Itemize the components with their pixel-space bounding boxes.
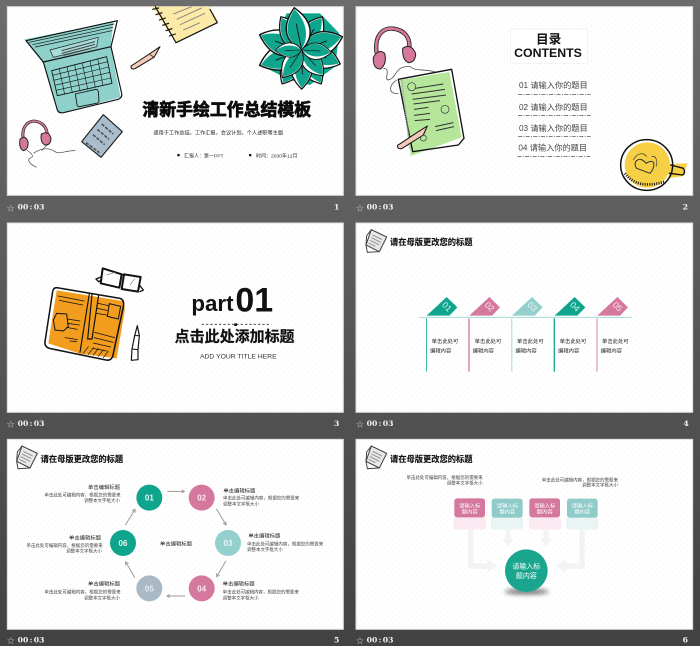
centre label: 单击编辑标题 — [160, 540, 193, 548]
box 1 — [454, 498, 485, 517]
icon: headphones — [373, 29, 435, 94]
footer: slide 3 time — [6, 419, 44, 431]
step 04: 04 — [197, 584, 207, 593]
step 03 — [215, 530, 241, 556]
part number: part — [191, 291, 234, 316]
page number 2: 2 — [683, 203, 688, 212]
part number — [191, 282, 273, 320]
icon: pencil — [131, 47, 160, 69]
box 3 — [529, 498, 560, 517]
contents item 04 — [517, 143, 591, 156]
step 06: 06 — [119, 539, 128, 548]
text block 04 — [223, 580, 299, 601]
right description — [542, 476, 618, 489]
slide 6 heading: 请在母版更改您的标题 — [390, 454, 473, 464]
flag column 01 — [426, 297, 459, 372]
flag column 03 — [511, 297, 544, 372]
text block 04: 调整本文字框大小 — [223, 594, 259, 601]
box 4 — [567, 499, 598, 518]
contents heading: 目录 — [536, 32, 562, 46]
slide 1 background — [7, 7, 343, 195]
text block 01: 单击编辑标题 — [88, 483, 121, 491]
flag column 01: 01 — [440, 300, 454, 314]
centre circle: 请输入标 — [512, 562, 540, 571]
panel: slide 5 cycle — [6, 439, 343, 646]
left description: 单击此处可编辑内容，根据您的需要来 — [406, 474, 483, 481]
right description: 调整本文字框大小 — [582, 482, 618, 489]
flag column 03: 编辑内容 — [515, 347, 537, 355]
flow arrows — [468, 530, 585, 573]
flag column 05: 单击此处可 — [602, 337, 629, 345]
flag column 04: 编辑内容 — [558, 347, 580, 355]
slide 3 background — [7, 223, 343, 412]
step 04 — [189, 575, 215, 601]
text block 03: 调整本文字框大小 — [247, 546, 283, 553]
icon: document — [17, 446, 37, 469]
footer: slide 4 time — [356, 419, 393, 431]
contents item 03: 03 请输入你的题目 — [519, 123, 588, 133]
contents item 04: 04 请输入你的题目 — [518, 143, 587, 153]
box 1: 请输入标 — [459, 501, 481, 509]
text block 06: 单击此处可编辑内容，根据您的需要来 — [26, 542, 103, 549]
icon: headphones with cord — [20, 121, 75, 167]
text block 03 — [247, 531, 324, 553]
footer: slide 6 time — [356, 635, 393, 646]
icon: orange open book — [45, 288, 125, 360]
contents item 02 — [518, 102, 591, 116]
text block 05: 单击编辑标题 — [88, 580, 121, 588]
flag column 02 — [468, 297, 502, 372]
slide 5 heading: 请在母版更改您的标题 — [41, 454, 124, 464]
flag column 05 — [596, 297, 629, 372]
text block 03: 单击此处可编辑内容，根据您的需要来 — [247, 540, 324, 547]
panel: slide 3 section — [6, 223, 343, 431]
date: 时间：2030年12月 — [256, 153, 298, 160]
text block 06: 调整本文字框大小 — [66, 548, 102, 555]
section title: 点击此处添加标题 — [175, 327, 295, 345]
flag column 05: 编辑内容 — [601, 347, 623, 355]
cycle arrows — [126, 490, 226, 597]
panel: slide 4 flags — [356, 223, 693, 431]
slide 6 background — [356, 439, 693, 629]
icon: laptop — [24, 21, 122, 113]
text block 03: 单击编辑标题 — [248, 531, 281, 539]
step 03: 03 — [224, 539, 233, 548]
flag column 02: 02 — [483, 300, 497, 314]
footer: slide 2 time: 00 : 03 — [367, 203, 393, 212]
text block 06: 单击编辑标题 — [69, 534, 102, 542]
panel: slide 1 cover — [6, 6, 346, 214]
contents heading — [510, 29, 587, 63]
slide 5 background — [7, 439, 343, 629]
page number 1: 1 — [334, 203, 339, 212]
contents item 01: 01 请输入你的题目 — [519, 80, 588, 90]
flag column 04: 单击此处可 — [560, 337, 587, 345]
footer: slide 2 time — [356, 203, 393, 214]
step 05: 05 — [145, 584, 154, 593]
text block 04: 单击编辑标题 — [223, 580, 255, 588]
icon: coffee cup — [621, 140, 687, 190]
panel: slide 2 contents — [356, 7, 693, 214]
text block 01 — [44, 483, 121, 504]
contents heading: CONTENTS — [514, 46, 582, 60]
contents item 01 — [518, 80, 591, 95]
icon: document — [366, 230, 387, 252]
flag column 01: 编辑内容 — [430, 347, 452, 355]
text block 01: 调整本文字框大小 — [84, 497, 120, 504]
footer: slide 2 time: ☆ — [356, 203, 365, 214]
slide 2 background — [356, 7, 693, 195]
footer: slide 1 time — [6, 203, 44, 214]
icon: glasses — [96, 268, 143, 292]
right description: 单击此处可编辑内容，根据您的需要来 — [542, 476, 618, 483]
step 05 — [136, 575, 162, 601]
centre circle: 题内容 — [516, 571, 537, 580]
page number 4: 4 — [683, 419, 689, 428]
page number 3: 3 — [334, 419, 339, 428]
title: 清新手绘工作总结模板 — [142, 99, 311, 119]
left description: 调整本文字框大小 — [447, 479, 483, 486]
flag column 04: 04 — [568, 300, 582, 314]
panel: slide 6 flow — [356, 439, 693, 646]
icon: document — [366, 446, 387, 469]
step 01 — [136, 485, 162, 511]
icon: tablet — [82, 115, 122, 157]
text block 04: 单击此处可编辑内容，根据您的需要来 — [223, 589, 299, 596]
slide 4 background — [356, 223, 693, 412]
footer: slide 3 time: ☆ — [6, 420, 15, 431]
circle shadow — [505, 589, 549, 595]
box reflections — [454, 517, 598, 529]
footer: slide 3 time: 00 : 03 — [18, 419, 44, 428]
text block 02 — [223, 486, 300, 507]
icon: plant — [255, 6, 346, 89]
box 4: 题内容 — [574, 507, 591, 515]
footer: slide 1 time: 00 : 03 — [18, 203, 44, 212]
part number: 01 — [235, 282, 273, 320]
icon: pen — [131, 326, 139, 360]
text block 02: 单击此处可编辑内容，根据您的需要来 — [223, 495, 300, 502]
text block 05: 单击此处可编辑内容，根据您的需要来 — [44, 589, 121, 596]
box 2: 题内容 — [499, 507, 516, 515]
flag column 02: 单击此处可 — [475, 337, 502, 345]
text block 02: 单击编辑标题 — [223, 486, 256, 494]
icon: pencil — [397, 126, 427, 149]
contents item 03 — [518, 123, 591, 137]
contents item 02: 02 请输入你的题目 — [519, 102, 588, 112]
flag column 05: 05 — [611, 300, 625, 314]
footer: slide 6 time: 00 : 03 — [367, 635, 393, 644]
subtitle: 适用于工作总结，工作汇报，会议计划，个人述职等主题 — [153, 128, 283, 136]
box 3: 题内容 — [537, 507, 553, 515]
footer: slide 4 time: 00 : 03 — [367, 419, 393, 428]
text block 05: 调整本文字框大小 — [84, 594, 120, 601]
footer: slide 4 time: ☆ — [356, 420, 365, 431]
page number 5: 5 — [334, 635, 339, 644]
section subtitle: ADD YOUR TITLE HERE — [200, 353, 277, 360]
footer: slide 5 time: 00 : 03 — [18, 635, 44, 644]
presenter: 汇报人：第一PPT — [184, 153, 224, 160]
box 2: 请输入标 — [497, 501, 519, 509]
flag column 01: 单击此处可 — [432, 337, 459, 345]
flag column 02: 编辑内容 — [473, 347, 495, 355]
icon: spiral notebook — [152, 7, 218, 43]
text block 06 — [26, 534, 103, 555]
step 06 — [110, 530, 136, 556]
box 2 — [492, 499, 523, 518]
flag column 04 — [554, 297, 587, 372]
text block 05 — [44, 580, 121, 601]
text block 01: 单击此处可编辑内容，根据您的需要来 — [44, 492, 121, 499]
centre circle — [505, 549, 548, 592]
step 01: 01 — [145, 494, 154, 503]
icon: green document — [398, 69, 464, 156]
flag column 03: 单击此处可 — [517, 337, 544, 345]
left description — [406, 474, 483, 486]
box 4: 请输入标 — [572, 501, 594, 509]
footer: slide 1 time: ☆ — [6, 203, 15, 214]
box 1: 题内容 — [462, 507, 478, 515]
footer: slide 5 time — [6, 635, 44, 646]
flag column 03: 03 — [525, 300, 539, 314]
dashed divider — [202, 323, 269, 326]
page number 6: 6 — [683, 635, 688, 644]
step 02: 02 — [197, 494, 207, 503]
timeline axis — [419, 316, 632, 319]
text block 02: 调整本文字框大小 — [223, 500, 259, 507]
step 02 — [189, 485, 215, 511]
slide 4 heading: 请在母版更改您的标题 — [390, 237, 473, 247]
box 3: 请输入标 — [534, 501, 556, 509]
